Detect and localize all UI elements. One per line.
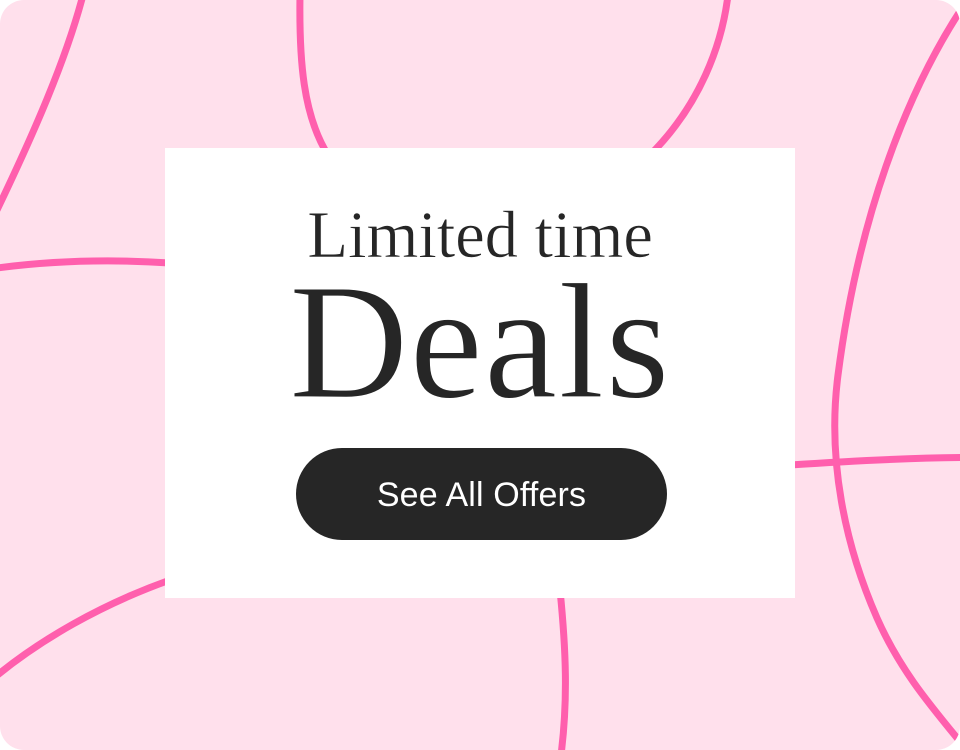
white card bbox=[165, 148, 795, 598]
button: See All Offers bbox=[296, 448, 667, 540]
heading: Limited time: Limited time bbox=[307, 198, 653, 272]
button: See All Offers: See All Offers bbox=[377, 476, 586, 514]
heading: Deals: Deals bbox=[289, 250, 671, 433]
